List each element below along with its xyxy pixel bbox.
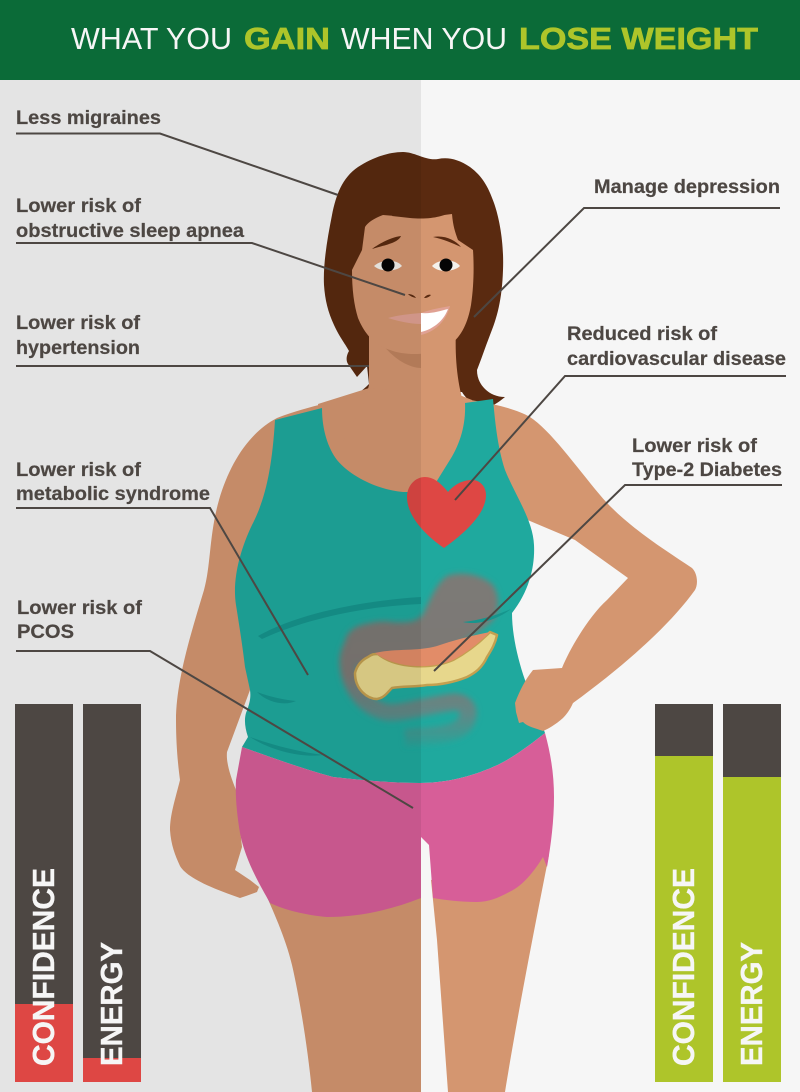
callout: PCOS <box>16 598 413 808</box>
left leg <box>262 880 421 1092</box>
right eye <box>432 260 460 271</box>
callout: manage depression: Manage depression <box>594 177 780 198</box>
tank top <box>235 399 545 783</box>
left arm <box>170 392 370 898</box>
callout: diabetes: Lower risk of <box>632 436 758 457</box>
header banner <box>0 0 800 80</box>
callout: diabetes: Type-2 Diabetes <box>632 460 782 481</box>
stomach and intestine <box>345 574 498 738</box>
callout: diabetes <box>434 436 782 671</box>
callout: metabolic syndrome <box>16 460 308 675</box>
callout: cardiovascular: cardiovascular disease <box>567 349 786 370</box>
callout: hypertension: hypertension <box>16 338 140 359</box>
body skin and arms <box>170 388 697 1092</box>
title: WHAT YOU <box>71 21 232 56</box>
title: LOSE WEIGHT <box>519 21 758 56</box>
callout: less migraines: Less migraines <box>16 108 161 129</box>
callout: less migraines <box>16 108 338 195</box>
callout: metabolic syndrome: Lower risk of <box>16 460 142 481</box>
face <box>352 214 474 354</box>
left eye <box>374 261 402 270</box>
pancreas <box>355 632 497 699</box>
title: WHEN YOU <box>341 21 507 56</box>
right brow <box>433 237 461 247</box>
callout: PCOS: PCOS <box>17 622 74 643</box>
heart <box>407 477 486 548</box>
teeth <box>421 309 448 332</box>
nose <box>408 294 431 298</box>
callout: sleep apnea: Lower risk of <box>16 196 142 217</box>
mouth: sad half <box>388 313 421 324</box>
title: GAIN <box>244 21 330 56</box>
eyebrows <box>372 236 461 249</box>
bar: confidence before <box>15 704 73 1082</box>
eyes <box>374 258 460 272</box>
callout: hypertension <box>16 313 369 366</box>
bar: confidence after: CONFIDENCE <box>666 868 701 1066</box>
bar: energy before <box>83 704 141 1082</box>
callout: metabolic syndrome: metabolic syndrome <box>16 484 210 505</box>
title <box>71 21 758 56</box>
callout: manage depression <box>474 177 780 317</box>
neck <box>360 330 468 420</box>
chest <box>318 388 472 510</box>
callout: sleep apnea <box>16 196 405 295</box>
bar: energy after <box>723 704 781 1082</box>
hair fringe <box>389 195 452 219</box>
bar: confidence before: CONFIDENCE <box>26 868 61 1066</box>
left brow <box>372 236 401 249</box>
callout: PCOS: Lower risk of <box>17 598 143 619</box>
right arm <box>440 395 697 703</box>
callout: cardiovascular: Reduced risk of <box>567 324 718 345</box>
bar: confidence after <box>655 704 713 1082</box>
top folds <box>250 597 421 756</box>
bar: energy before: ENERGY <box>94 942 129 1066</box>
callout: cardiovascular <box>455 324 786 500</box>
bar: energy after: ENERGY <box>734 942 769 1066</box>
right hand <box>515 668 590 731</box>
left half shade <box>0 80 421 1092</box>
mouth: smiling half <box>421 306 450 335</box>
stomach fold <box>463 609 511 623</box>
right leg <box>431 855 549 1092</box>
hair <box>324 152 505 408</box>
callout: hypertension: Lower risk of <box>16 313 141 334</box>
chin shadow <box>383 345 421 368</box>
callout: sleep apnea: obstructive sleep apnea <box>16 221 244 242</box>
shorts <box>236 733 554 917</box>
